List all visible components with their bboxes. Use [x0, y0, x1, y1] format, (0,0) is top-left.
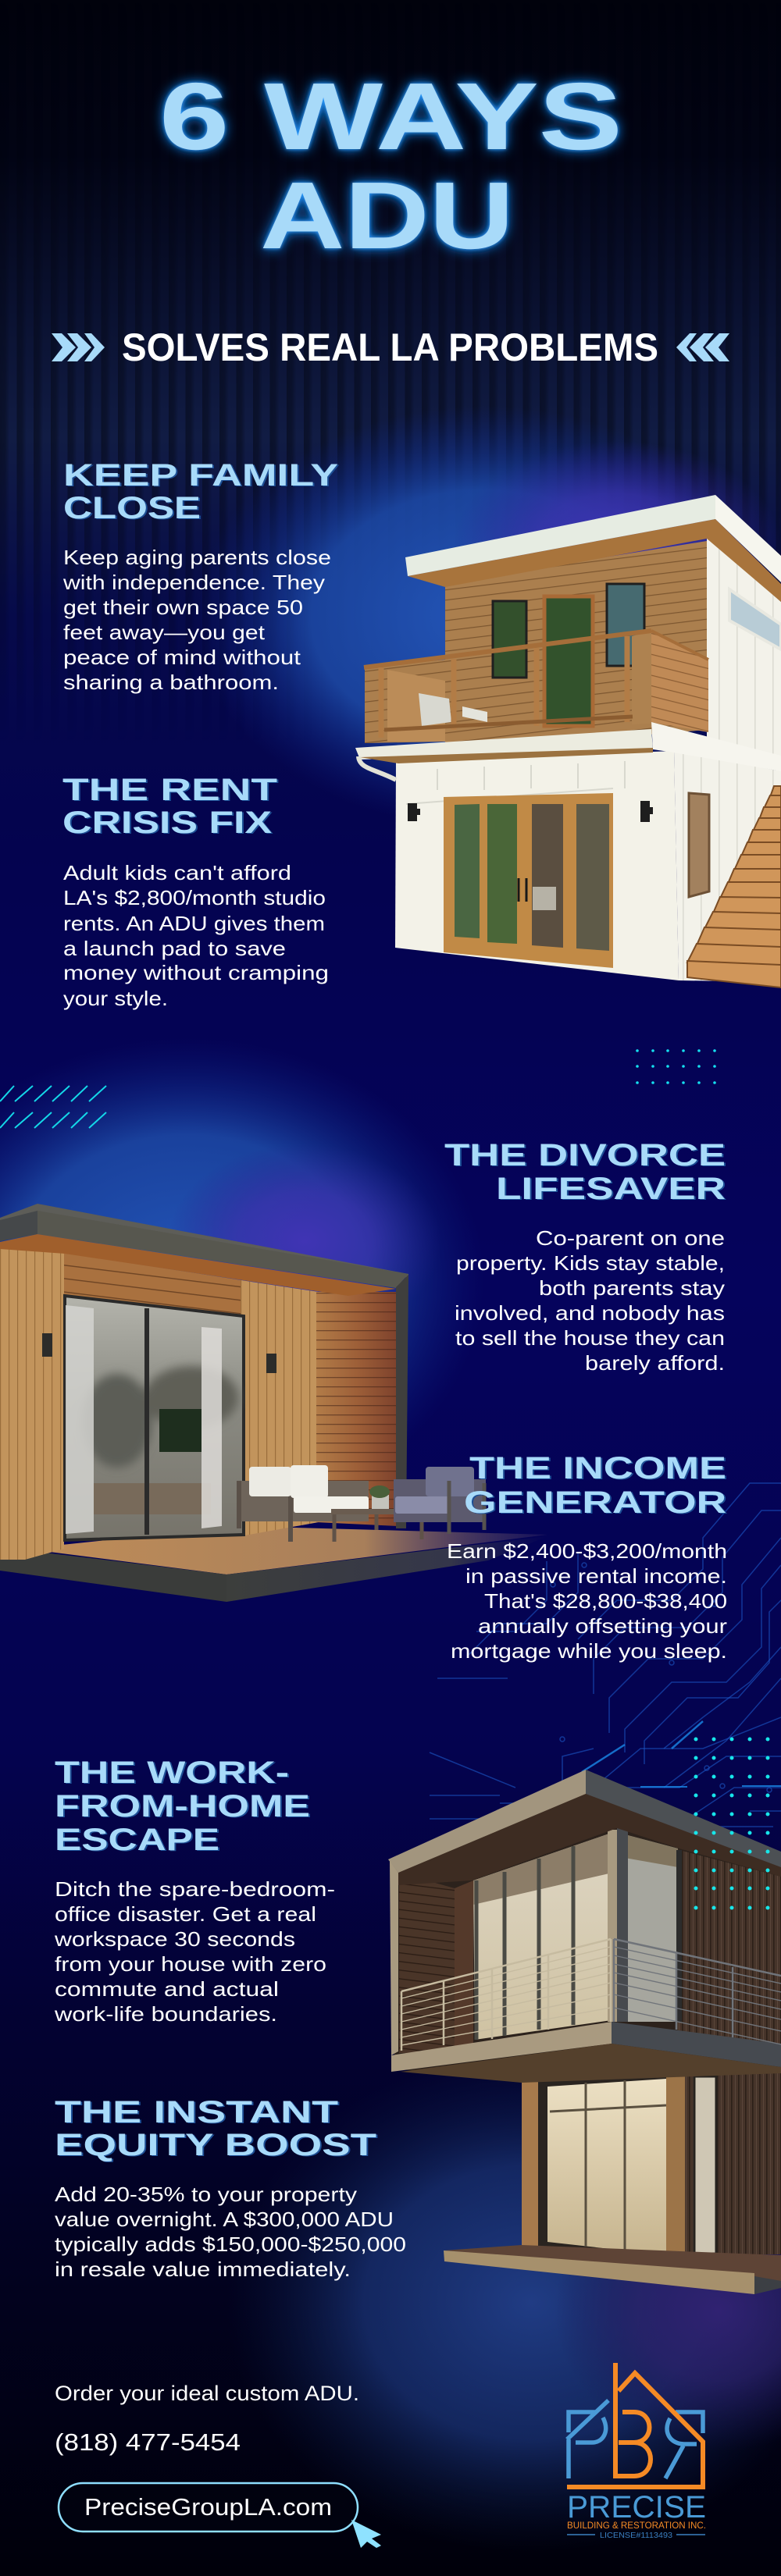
- grey corner post: [396, 1275, 408, 1528]
- panel: instant equity boost: [55, 2095, 406, 2281]
- roof: [0, 1204, 408, 1296]
- body text: in resale value immediately.: [55, 2258, 351, 2281]
- body text: LA's $2,800/month studio: [63, 886, 326, 909]
- body text: [54, 1877, 335, 2026]
- heading: ESCAPE: [55, 1823, 219, 1857]
- website button: PreciseGroupLA.com: [84, 2493, 332, 2521]
- body text: value overnight. A $300,000 ADU: [55, 2208, 394, 2231]
- body text: sharing a bathroom.: [63, 671, 279, 694]
- logo text: license: LICENSE#1113493: [600, 2531, 672, 2540]
- body text: get their own space 50: [63, 596, 303, 619]
- upper windows: [493, 584, 644, 726]
- body text: office disaster. Get a real: [55, 1902, 316, 1926]
- side window: [729, 589, 781, 649]
- heading: FROM-HOME: [55, 1789, 310, 1823]
- icon: right chevrons: [676, 333, 729, 361]
- balcony floor: [391, 2022, 781, 2083]
- upper storey backing: [394, 1791, 781, 2083]
- decoration: diagonal slashes: [0, 1086, 106, 1128]
- heading: KEEP FAMILY: [63, 458, 338, 493]
- heading: [55, 2095, 376, 2162]
- title: [159, 63, 622, 269]
- logo text: company line: BUILDING & RESTORATION INC.: [567, 2521, 706, 2531]
- body text: in passive rental income.: [465, 1564, 727, 1588]
- body text: Keep aging parents close: [63, 546, 331, 569]
- sliding doors: [444, 793, 613, 968]
- body text: money without cramping: [63, 961, 329, 984]
- sliding glass door: [65, 1296, 244, 1540]
- icon: left chevrons: [52, 333, 105, 361]
- body text: to sell the house they can: [455, 1326, 725, 1350]
- outdoor furniture: [239, 1465, 486, 1542]
- heading: CRISIS FIX: [62, 806, 272, 840]
- icon: cursor arrow: [351, 2520, 381, 2548]
- wall sconces: [42, 1333, 276, 1373]
- body text: involved, and nobody has: [455, 1301, 725, 1325]
- heading: THE RENT: [62, 773, 277, 807]
- heading: [55, 1756, 310, 1857]
- logo mark: house with PBR: [567, 2363, 703, 2487]
- lower storey: [522, 2063, 781, 2256]
- illustration: single-storey ADU with deck: [0, 1204, 547, 1602]
- body text: Co-parent on one: [536, 1226, 725, 1250]
- subtitle with chevrons: [52, 326, 729, 369]
- body text: work-life boundaries.: [54, 2002, 277, 2026]
- body text: [63, 861, 329, 1010]
- title: ADU: [260, 162, 514, 269]
- upper horizontal band: [64, 1253, 251, 1319]
- left vertical wood wall: [0, 1245, 64, 1560]
- body text: Earn $2,400-$3,200/month: [447, 1539, 727, 1563]
- heading: THE INSTANT: [55, 2095, 338, 2129]
- stairs: [687, 786, 781, 987]
- upper windows: [473, 1828, 682, 2040]
- lower walls and slab: [355, 722, 781, 982]
- body text: Add 20-35% to your property: [55, 2183, 357, 2206]
- body text: [55, 2183, 406, 2281]
- body text: your style.: [63, 987, 168, 1010]
- phone number: (818) 477-5454: [55, 2428, 241, 2456]
- call to action text: Order your ideal custom ADU.: [55, 2382, 359, 2405]
- body text: [62, 546, 331, 694]
- body text: Ditch the spare-bedroom-: [55, 1877, 335, 1901]
- wall sconces: [408, 801, 653, 822]
- subtitle text: SOLVES REAL LA PROBLEMS: [122, 326, 658, 369]
- heading: [444, 1138, 726, 1206]
- panel: work-from-home escape: [54, 1756, 335, 2026]
- upper wall: [445, 541, 707, 751]
- footer contact: [55, 2382, 381, 2548]
- body text: mortgage while you sleep.: [451, 1639, 727, 1663]
- lower deck: [444, 2245, 781, 2294]
- deck: [0, 1526, 547, 1602]
- heading: [464, 1451, 726, 1520]
- body text: with independence. They: [62, 571, 325, 594]
- body text: barely afford.: [585, 1351, 725, 1375]
- body text: peace of mind without: [63, 646, 301, 669]
- heading: CLOSE: [63, 491, 201, 525]
- heading: GENERATOR: [464, 1485, 726, 1520]
- heading: THE INCOME: [469, 1451, 726, 1485]
- illustration: two-storey ADU with balcony and stairs: [355, 495, 781, 987]
- upper storey back walls: [399, 1849, 781, 2057]
- body text: a launch pad to save: [63, 937, 286, 960]
- illustration: modern two-storey ADU with railing: [388, 1770, 781, 2294]
- body text: [455, 1226, 725, 1375]
- lower side window: [689, 793, 709, 897]
- heading: THE WORK-: [55, 1756, 289, 1790]
- panel: rent crisis fix: [62, 773, 329, 1010]
- body text: from your house with zero: [55, 1952, 326, 1976]
- body text: commute and actual: [55, 1977, 279, 2001]
- heading: [63, 458, 338, 525]
- body text: Adult kids can't afford: [63, 861, 291, 884]
- title: 6 WAYS: [159, 63, 622, 169]
- logo: [567, 2363, 706, 2540]
- body text: workspace 30 seconds: [54, 1927, 295, 1951]
- heading: THE DIVORCE: [444, 1138, 726, 1172]
- circuit pattern: [430, 1483, 781, 1834]
- body text: feet away—you get: [63, 621, 266, 644]
- body text: typically adds $150,000-$250,000: [55, 2233, 406, 2256]
- roof: [405, 495, 781, 602]
- panel: income generator: [447, 1451, 727, 1663]
- heading: EQUITY BOOST: [55, 2128, 376, 2162]
- upper side wall: [707, 535, 781, 773]
- balcony: [364, 631, 708, 743]
- heading: [62, 773, 277, 840]
- decoration: dot grid top: [636, 1049, 716, 1084]
- body text: property. Kids stay stable,: [456, 1251, 725, 1275]
- roof: [388, 1770, 781, 2055]
- panel: divorce lifesaver: [444, 1138, 726, 1375]
- website button: [59, 2483, 358, 2532]
- balcony railing: [401, 1939, 781, 2051]
- body text: That's $28,800-$38,400: [484, 1589, 727, 1613]
- body text: annually offsetting your: [478, 1614, 727, 1638]
- right vertical wood: [241, 1280, 319, 1536]
- logo text: PRECISE: PRECISE: [567, 2490, 706, 2524]
- body text: rents. An ADU gives them: [63, 912, 325, 935]
- body text: both parents stay: [539, 1276, 725, 1300]
- panel: keep family close: [62, 458, 338, 694]
- decoration: cyan dot grid: [694, 1738, 770, 1909]
- body text: [447, 1539, 727, 1663]
- heading: LIFESAVER: [496, 1172, 726, 1206]
- right horizontal wood: [316, 1292, 398, 1526]
